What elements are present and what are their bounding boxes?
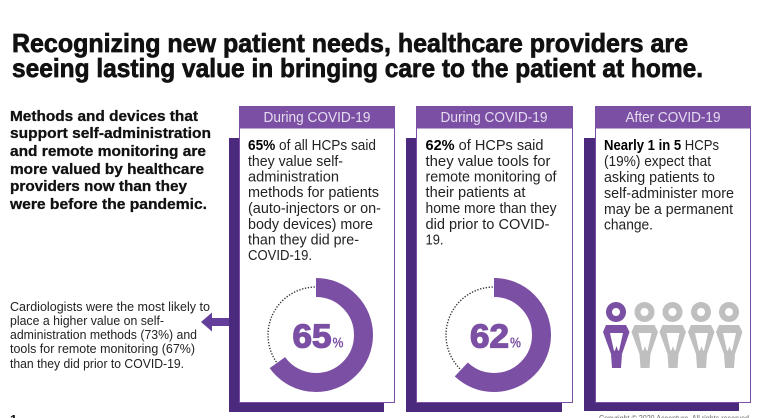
card text: remote monitoring of [426, 168, 557, 186]
intro text: more valued by healthcare [10, 161, 204, 178]
icon: grey person [632, 302, 658, 368]
card text: change. [604, 216, 653, 234]
icon: highlighted person [603, 302, 630, 368]
card shadow [584, 138, 739, 411]
icon: grey person [688, 302, 714, 368]
card text: body devices) more [248, 216, 373, 233]
card text: their patients at [426, 184, 526, 201]
panel: during COVID-19 self-administration [229, 106, 395, 412]
cardiologists note: than they did prior to COVID-19. [10, 357, 184, 371]
card shadow [229, 138, 384, 412]
card text [604, 137, 734, 234]
card text: COVID-19. [248, 247, 312, 264]
intro text: Methods and devices that [10, 108, 198, 125]
title: Recognizing new patient needs, healthcare providers are [12, 28, 688, 58]
card body [596, 106, 750, 402]
card text: than they did pre- [248, 232, 359, 248]
card header label: After COVID-19 [626, 110, 720, 126]
card header label: During COVID-19 [440, 110, 548, 126]
cardiologists note: Cardiologists were the most likely to [10, 300, 210, 314]
card text: (19%) expect that [604, 153, 712, 170]
card text: they value self- [248, 153, 343, 170]
donut chart: 65% [268, 287, 364, 383]
card text: asking patients to [604, 169, 715, 186]
card text [248, 137, 381, 264]
donut chart: 65%: % [332, 334, 344, 352]
card header [595, 106, 751, 128]
icon row: 1 in 5 people [603, 302, 742, 368]
card text: Nearly 1 in 5 HCPs [604, 137, 719, 154]
card text: they value tools for [426, 153, 551, 170]
card text: 19. [426, 232, 444, 248]
title: seeing lasting value in bringing care to the patient at home. [12, 53, 703, 83]
donut chart: 62% [446, 287, 542, 383]
card text: 65% of all HCPs said [248, 137, 376, 154]
cardiologists note: place a higher value on self- [10, 314, 164, 328]
intro text [9, 108, 211, 213]
card header [416, 106, 573, 128]
arrow: to cardiologists note [201, 312, 230, 332]
card text: may be a permanent [604, 201, 734, 218]
donut chart: 65%: 65 [292, 318, 332, 354]
card body [240, 106, 394, 402]
intro text: and remote monitoring are [10, 143, 206, 160]
icon: grey person [660, 302, 686, 368]
card text: home more than they [426, 200, 557, 217]
title [12, 28, 703, 83]
card text: (auto-injectors or on- [248, 200, 381, 217]
cardiologists note: tools for remote monitoring (67%) [10, 342, 195, 356]
donut chart: 62%: % [510, 334, 521, 352]
panel: during COVID-19 remote monitoring [406, 106, 573, 412]
card text [426, 137, 557, 248]
icon: grey person [716, 302, 742, 368]
cardiologists note [10, 300, 210, 371]
panel: after COVID-19 [584, 106, 751, 411]
card text: methods for patients [248, 184, 379, 201]
intro text: providers now than they [10, 178, 188, 195]
card shadow [406, 138, 562, 412]
card text: 62% of HCPs said [426, 137, 544, 154]
intro text: support self-administration [10, 125, 211, 142]
card header [239, 106, 395, 128]
card body [416, 106, 572, 402]
card text: self-administer more [604, 185, 734, 202]
intro text: were before the pandemic. [9, 196, 207, 213]
donut chart: 62%: 62 [470, 318, 509, 354]
card header label: During COVID-19 [264, 110, 370, 126]
cardiologists note: administration methods (73%) and [10, 328, 197, 342]
card text: administration [248, 168, 339, 186]
card text: did prior to COVID- [426, 216, 550, 233]
